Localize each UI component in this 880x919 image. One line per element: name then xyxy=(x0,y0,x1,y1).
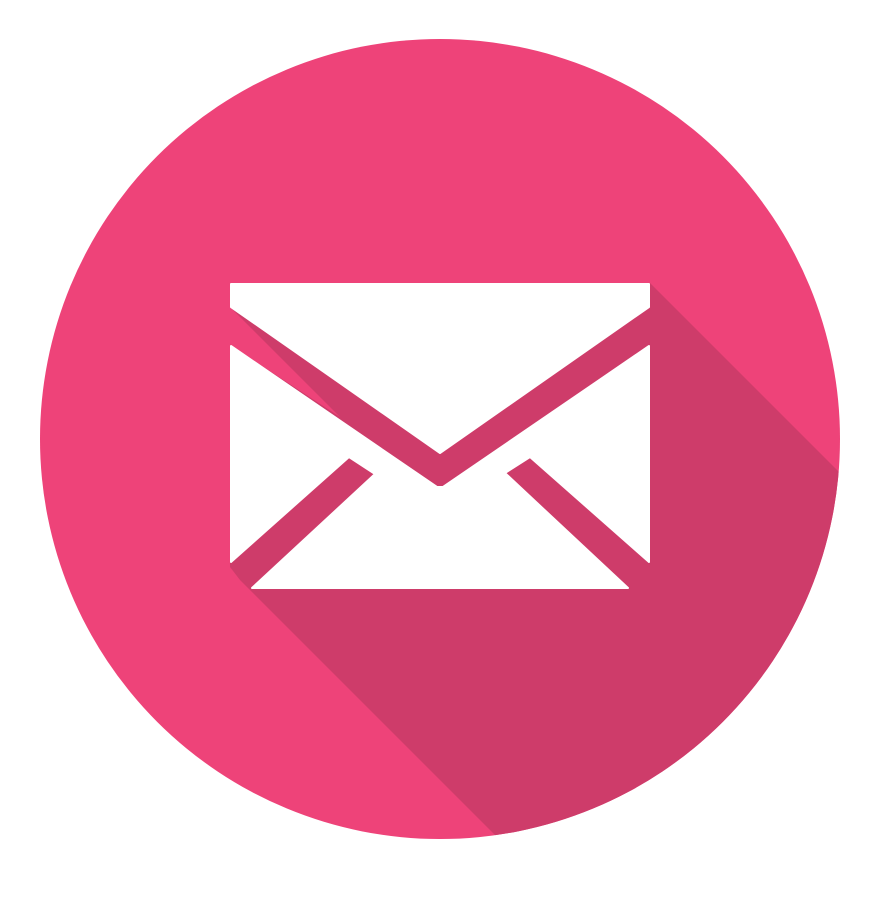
envelope xyxy=(231,284,649,588)
envelope body xyxy=(231,346,649,588)
envelope top flap xyxy=(231,284,649,453)
icon: email envelope in pink circle xyxy=(40,39,840,839)
pink circle background xyxy=(40,39,840,839)
long shadow xyxy=(230,283,839,836)
